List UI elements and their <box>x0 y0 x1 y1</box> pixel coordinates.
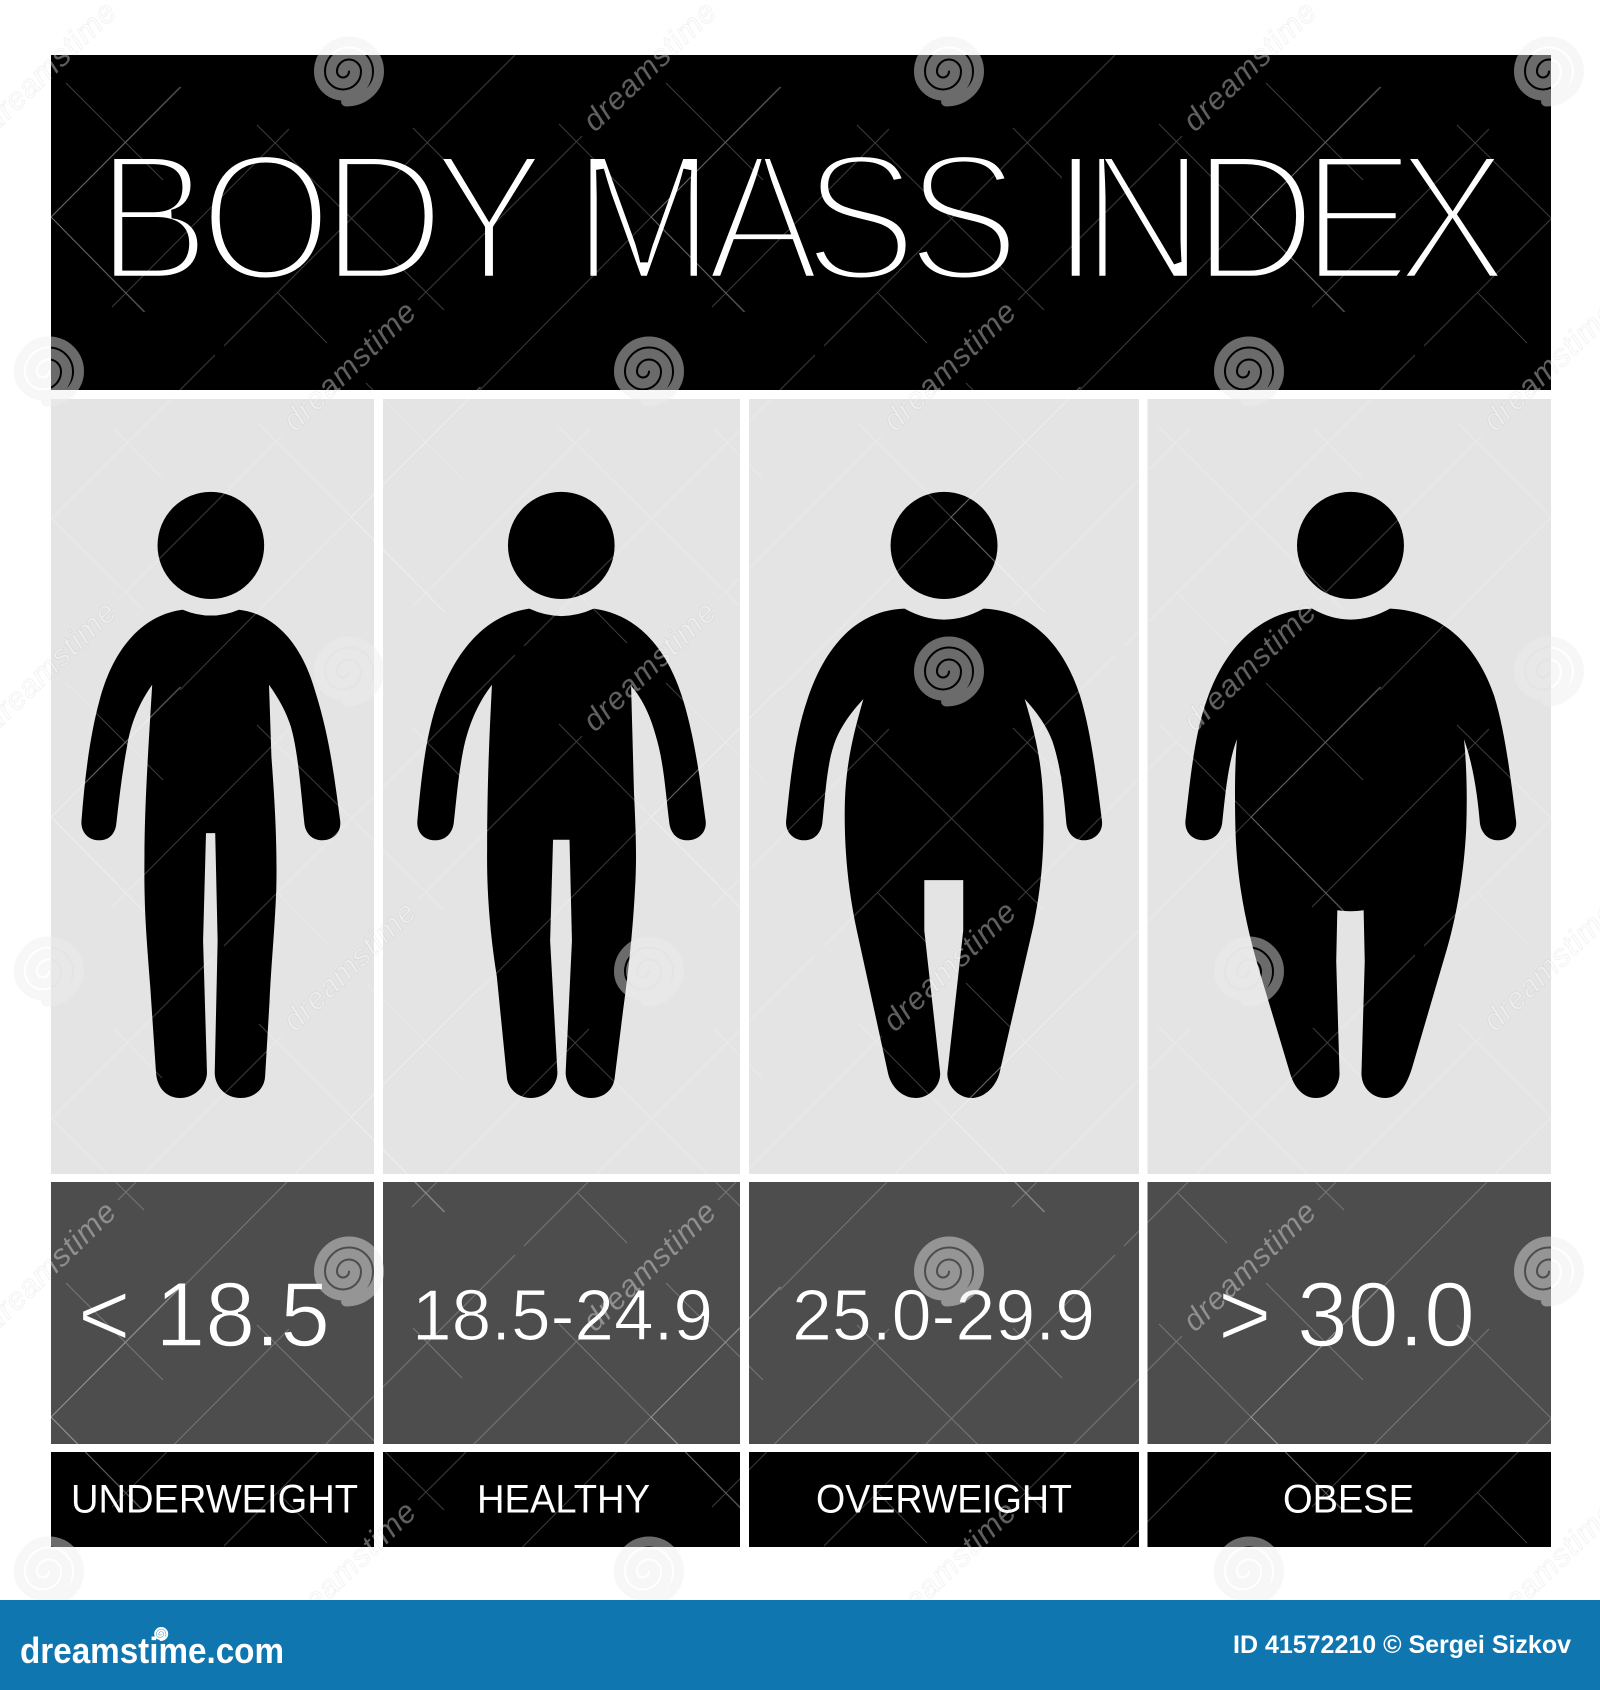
footer bar <box>0 1600 1600 1690</box>
icon: underweight person <box>81 492 340 1098</box>
BMI value: 25.0 to 29.9 <box>749 1182 1139 1444</box>
category label: overweight: OVERWEIGHT <box>816 1478 1072 1522</box>
footer credit: ID 41572210 © Sergei Sizkov <box>1233 1631 1571 1659</box>
category label: underweight: UNDERWEIGHT <box>71 1478 358 1522</box>
category label: healthy: HEALTHY <box>477 1478 650 1522</box>
category label: overweight <box>749 1452 1139 1547</box>
watermark overlay: dreamstime <box>276 894 423 1038</box>
watermark overlay: dreamstime <box>876 1494 1023 1638</box>
BMI value: 18.5 to 24.9: 18.5-24.9 <box>412 1276 713 1356</box>
BMI value: 18.5 to 24.9 <box>383 1182 740 1444</box>
watermark overlay: dreamstime <box>1176 1194 1323 1338</box>
category label: obese: OBESE <box>1283 1478 1414 1522</box>
title: BODY MASS INDEX: BODY MASS INDEX <box>96 116 1509 319</box>
watermark overlay: dreamstime <box>276 294 423 438</box>
watermark overlay: dreamstime <box>876 294 1023 438</box>
category label: obese <box>1148 1452 1551 1547</box>
footer logo: dreamstime.com: dreamstime.com <box>20 1630 284 1671</box>
BMI value: under 18.5 <box>51 1182 374 1444</box>
panel: healthy figure <box>383 399 740 1174</box>
watermark overlay: dreamstime <box>1176 594 1323 738</box>
BMI value: under 18.5: < 18.5 <box>78 1264 330 1366</box>
watermark overlay: dreamstime <box>876 894 1023 1038</box>
watermark overlay: dreamstime <box>276 1494 423 1638</box>
panel: underweight figure <box>51 399 374 1174</box>
icon: overweight person <box>786 492 1102 1098</box>
watermark overlay: dreamstime <box>576 594 723 738</box>
BMI value: over 30.0: > 30.0 <box>1218 1264 1475 1366</box>
panel: overweight figure <box>749 399 1139 1174</box>
BMI value: over 30.0 <box>1148 1182 1551 1444</box>
icon: healthy person <box>417 492 706 1098</box>
category label: healthy <box>383 1452 740 1547</box>
category label: underweight <box>51 1452 374 1547</box>
watermark overlay: dreamstime <box>576 1194 723 1338</box>
title banner <box>51 55 1551 390</box>
panel: obese figure <box>1148 399 1551 1174</box>
BMI value: 25.0 to 29.9: 25.0-29.9 <box>792 1276 1095 1356</box>
icon: obese person <box>1185 492 1516 1098</box>
icon: small spiral logo <box>155 1628 167 1640</box>
